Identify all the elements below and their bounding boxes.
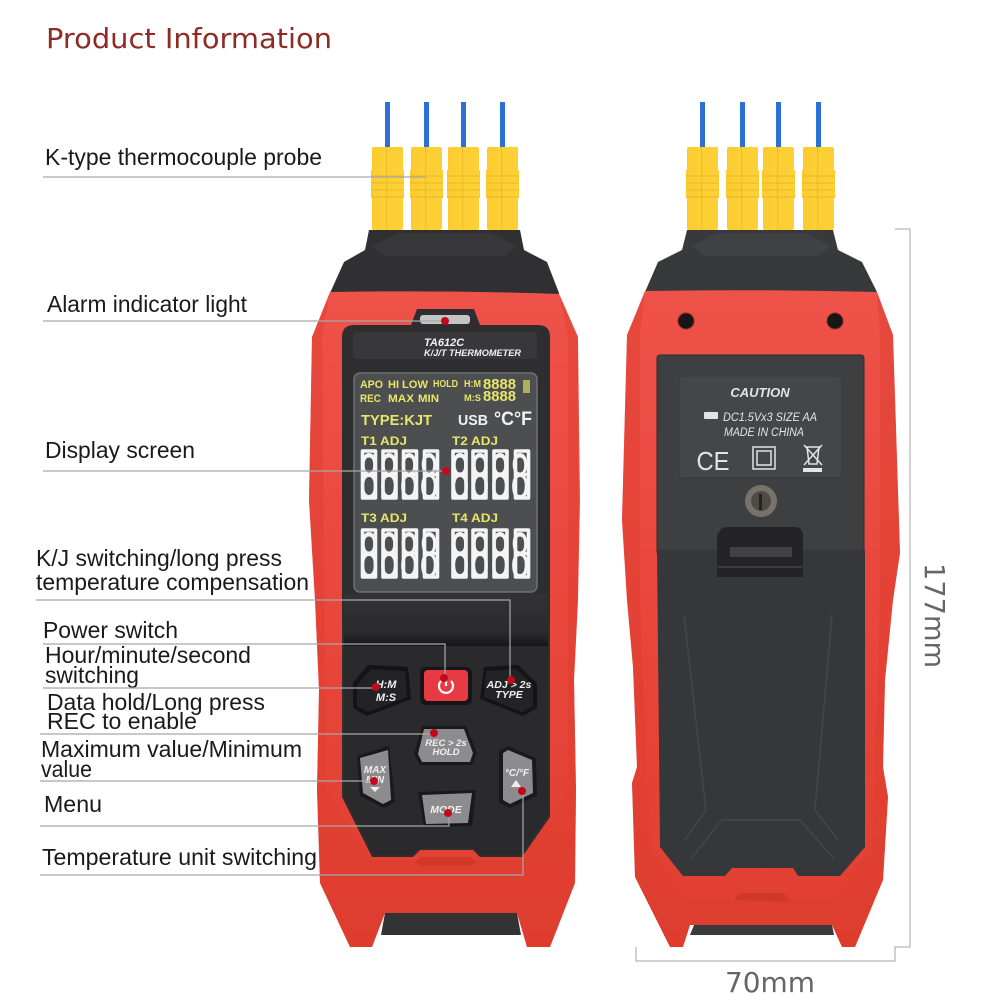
- callout: K/J switching: K/J switching/long press: [36, 545, 282, 571]
- caution label: DC1.5Vx3 SIZE AA: [723, 412, 817, 424]
- callout: data hold: REC to enable: [47, 708, 197, 734]
- button: unit: [499, 746, 537, 808]
- lcd screen: T1 ADJ: [361, 434, 407, 448]
- back device: [622, 102, 900, 947]
- callout: K/J switching: [36, 545, 515, 684]
- front bottom dark strip: [381, 913, 521, 935]
- button: ADJ TYPE: TYPE: [495, 689, 524, 701]
- button: MAX MIN: MAX: [364, 765, 387, 776]
- front side shading: [309, 293, 578, 947]
- lcd screen: H:M: [464, 379, 481, 390]
- label: 70mm: 70mm: [725, 966, 815, 999]
- callout: K-type thermocouple probe: K-type thermocouple probe: [45, 144, 322, 170]
- lower dark band: [344, 594, 548, 646]
- lcd screen: APO: [360, 379, 383, 391]
- model plate: K/J/T THERMOMETER: [424, 348, 521, 359]
- lcd screen: HOLD: [433, 379, 458, 390]
- back probes: [686, 102, 835, 230]
- button: H:M M:S: M:S: [376, 692, 397, 704]
- callout: hour minute second: Hour/minute/second: [45, 642, 251, 668]
- callout: max min: value: [41, 756, 92, 782]
- lcd screen: MIN: [418, 393, 439, 405]
- button: REC HOLD: REC > 2s: [425, 738, 467, 749]
- callout: data hold: [40, 689, 438, 737]
- button: ADJ TYPE: [480, 665, 537, 716]
- lcd screen: 8888: [450, 444, 530, 520]
- caution label: CAUTION: [730, 385, 790, 400]
- button: H:M M:S: [353, 665, 411, 716]
- model plate: TA612C: [424, 337, 465, 349]
- callout: alarm indicator light: [43, 291, 449, 325]
- lcd screen: MAX: [388, 393, 415, 405]
- model plate: [353, 332, 537, 359]
- front probes: [371, 102, 519, 230]
- callout: display screen: [43, 437, 450, 475]
- lcd screen: 8888: [359, 444, 439, 520]
- lcd screen: M:S: [464, 393, 481, 403]
- callout: temperature unit switching: Temperature unit switching: [42, 844, 317, 870]
- front lower notch: [415, 857, 477, 866]
- keypad lower panel: [344, 646, 548, 855]
- callout: alarm indicator light: Alarm indicator light: [47, 291, 248, 317]
- front top highlight: [372, 233, 517, 256]
- title: Product Information: [46, 22, 332, 55]
- back red body: [622, 290, 900, 947]
- front red body: [309, 291, 580, 947]
- front face panel: [342, 309, 550, 857]
- button: MAX MIN: [357, 746, 395, 808]
- button: REC HOLD: [414, 726, 477, 765]
- button: power: [420, 667, 472, 705]
- back upper panel: [657, 355, 864, 555]
- button: MAX MIN: MIN: [366, 775, 385, 786]
- lcd screen: LOW: [402, 379, 429, 391]
- button: H:M M:S: H:M: [376, 679, 397, 691]
- callout: menu: [40, 791, 452, 826]
- lcd screen: TYPE:KJT: [361, 412, 432, 429]
- lcd screen: 8888: [359, 523, 439, 599]
- tripod screw: [745, 485, 777, 517]
- caution label: [679, 376, 842, 478]
- lcd screen: T2 ADJ: [452, 434, 498, 448]
- callout: max min: Maximum value/Minimum: [41, 736, 302, 762]
- lcd screen: T3 ADJ: [361, 511, 407, 525]
- callout: max min: [40, 736, 378, 785]
- button: unit: °C/°F: [505, 768, 530, 779]
- lcd screen: [354, 373, 537, 599]
- lcd screen: 8888: [483, 388, 516, 405]
- callout: K/J switching: temperature compensation: [36, 569, 309, 595]
- lcd screen: 8888: [483, 376, 516, 393]
- back bottom dark strip: [690, 925, 834, 935]
- alarm light lens: [420, 315, 470, 324]
- lcd screen: HI: [388, 379, 399, 391]
- back lower notch: [734, 893, 790, 902]
- callout: hour minute second: [43, 642, 380, 691]
- callout: power switch: [43, 617, 448, 682]
- front device: [309, 102, 580, 947]
- button: ADJ TYPE: ADJ > 2s: [486, 679, 531, 691]
- callout: display screen: Display screen: [45, 437, 195, 463]
- back black top housing: [645, 230, 877, 310]
- lcd screen: REC: [360, 393, 381, 405]
- battery door: [657, 550, 865, 876]
- callout: hour minute second: switching: [45, 662, 139, 688]
- callout: power switch: Power switch: [43, 617, 178, 643]
- button: MODE: [418, 790, 476, 827]
- height dimension line: [636, 229, 910, 961]
- door ridges: [684, 615, 838, 860]
- callout: temperature unit switching: [40, 787, 526, 875]
- front black top housing: [330, 230, 559, 310]
- button: REC HOLD: HOLD: [433, 747, 460, 758]
- back screw hole right: [827, 313, 843, 329]
- button: MODE: MODE: [430, 804, 463, 816]
- lcd screen: °C°F: [494, 409, 532, 430]
- lcd screen: T4 ADJ: [452, 511, 498, 525]
- callout: menu: Menu: [44, 791, 102, 817]
- door latch: [717, 527, 803, 577]
- back screw hole left: [678, 313, 694, 329]
- caution label: MADE IN CHINA: [724, 427, 804, 439]
- callout: data hold: Data hold/Long press: [47, 689, 265, 715]
- lcd screen: USB: [458, 412, 488, 429]
- back side shading: [622, 292, 900, 947]
- back top highlight: [692, 233, 830, 256]
- label: 177mm: 177mm: [918, 563, 951, 668]
- caution label: CE: [696, 446, 730, 476]
- lcd screen: 8888: [450, 523, 530, 599]
